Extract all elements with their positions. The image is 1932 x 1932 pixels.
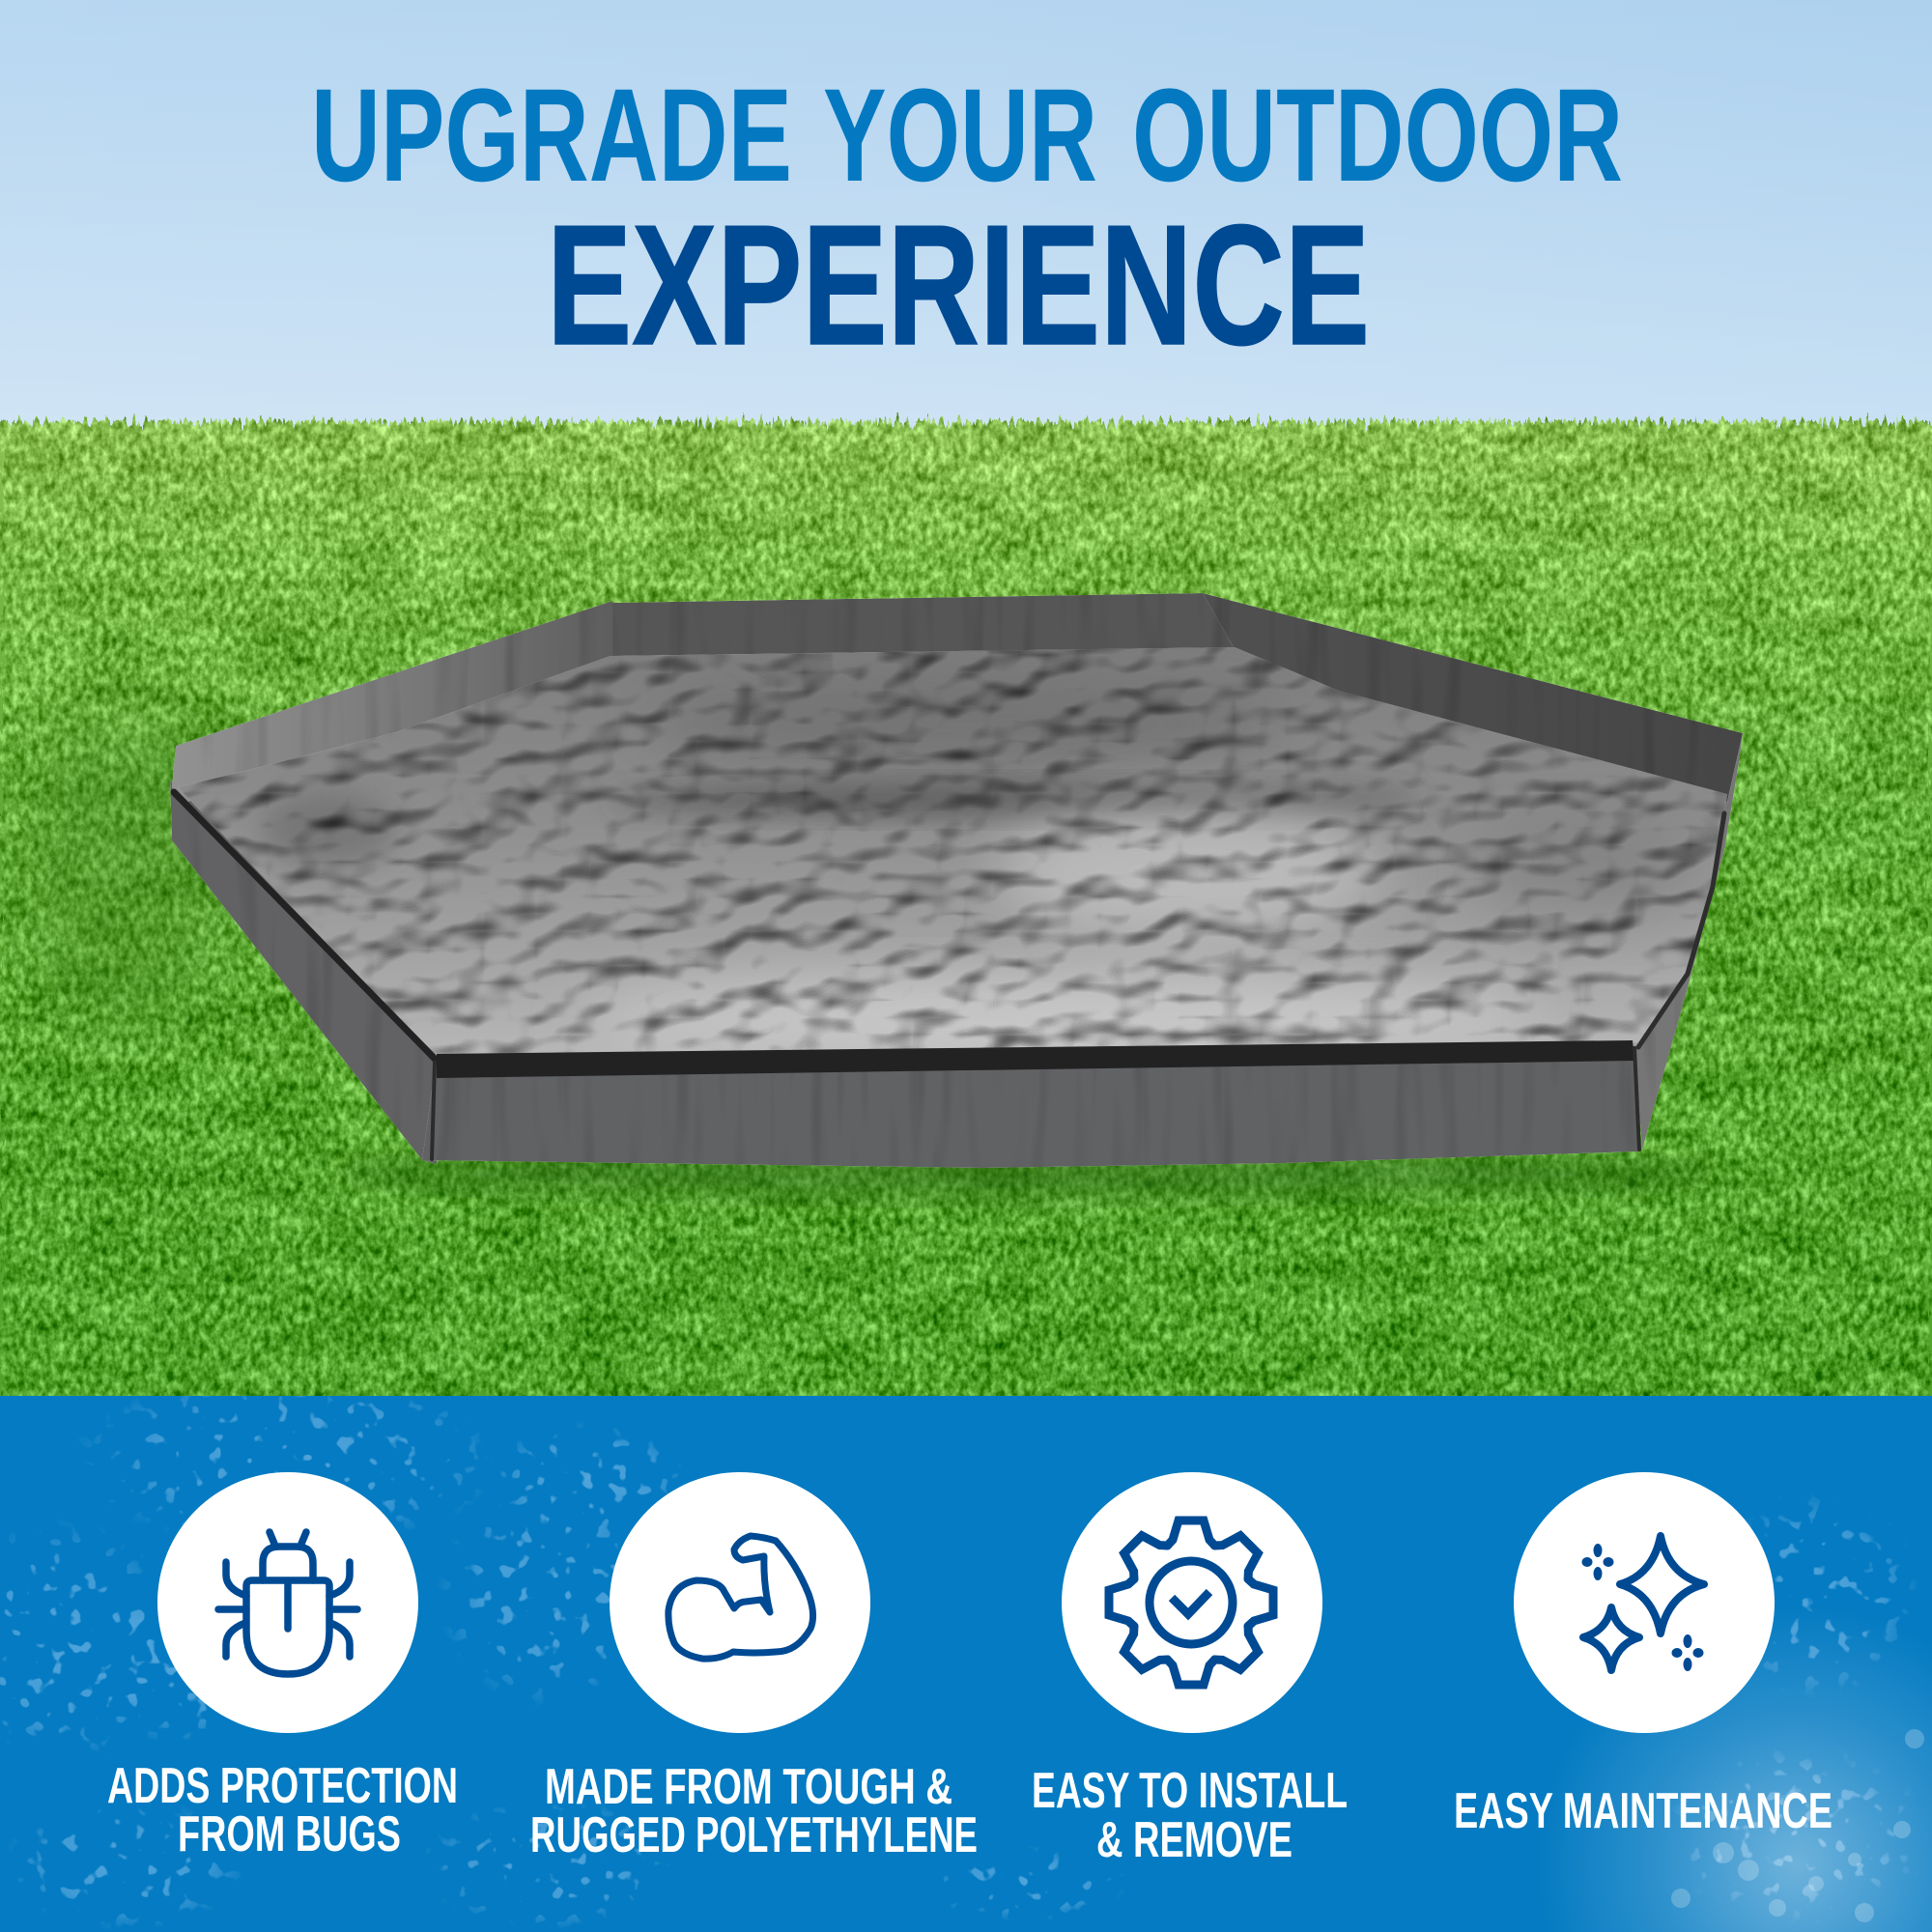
label: adds protection from bugs: FROM BUGS [178, 1806, 401, 1862]
tarp right outer wall [1634, 733, 1743, 1150]
label: made from tough and rugged polyethylene: RUGGED POLYETHYLENE [530, 1807, 978, 1863]
label: made from tough and rugged polyethylene [530, 1759, 978, 1863]
band lower-right splash [1536, 1604, 1932, 1932]
feature 4: easy maintenance [1454, 1472, 1833, 1839]
label: adds protection from bugs: ADDS PROTECTION [107, 1758, 458, 1814]
feature 1: bugs [107, 1472, 458, 1862]
icon: sparkles [1582, 1536, 1704, 1671]
photo: green grass lawn [0, 421, 1932, 1399]
icon circle: muscle [610, 1472, 870, 1733]
panel: blue features band [0, 1396, 1932, 1932]
heading line 1: YOUR [823, 62, 1097, 210]
heading line 1 [311, 62, 1623, 210]
tarp back wall [611, 593, 1246, 659]
tarp back-left wall [172, 601, 612, 804]
band speckle texture [0, 1396, 1932, 1932]
tarp left and right binding [174, 792, 1724, 1159]
heading [311, 62, 1623, 381]
feature 2: tough material [530, 1472, 978, 1863]
label: adds protection from bugs [107, 1758, 458, 1862]
heading line 2: EXPERIENCE [547, 189, 1370, 381]
label: made from tough and rugged polyethylene: MADE FROM TOUGH & [545, 1759, 952, 1815]
icon circle: bug [157, 1472, 418, 1733]
icon: flexed arm [668, 1536, 813, 1659]
feature 3: easy install [1032, 1472, 1348, 1868]
heading line 1: OUTDOOR [1132, 62, 1623, 210]
tarp front-left outer wall [170, 781, 446, 1164]
tarp black front binding [437, 1040, 1634, 1078]
label: easy to install and remove: & REMOVE [1096, 1812, 1293, 1868]
tarp back-right wall [1203, 593, 1743, 802]
photo: grey hexagonal ground tarp [170, 593, 1743, 1168]
icon: bug [218, 1532, 357, 1674]
tarp wrinkled floor [178, 647, 1727, 1061]
icon circle: sparkles [1514, 1472, 1775, 1733]
tarp front outer wall [422, 1058, 1637, 1168]
heading line 1: UPGRADE [311, 62, 792, 210]
sky background [0, 0, 1932, 454]
label: easy to install and remove [1032, 1763, 1348, 1868]
icon: gear with check [1109, 1520, 1273, 1685]
icon circle: gear [1062, 1472, 1322, 1733]
label: easy to install and remove: EASY TO INSTALL [1032, 1763, 1348, 1819]
